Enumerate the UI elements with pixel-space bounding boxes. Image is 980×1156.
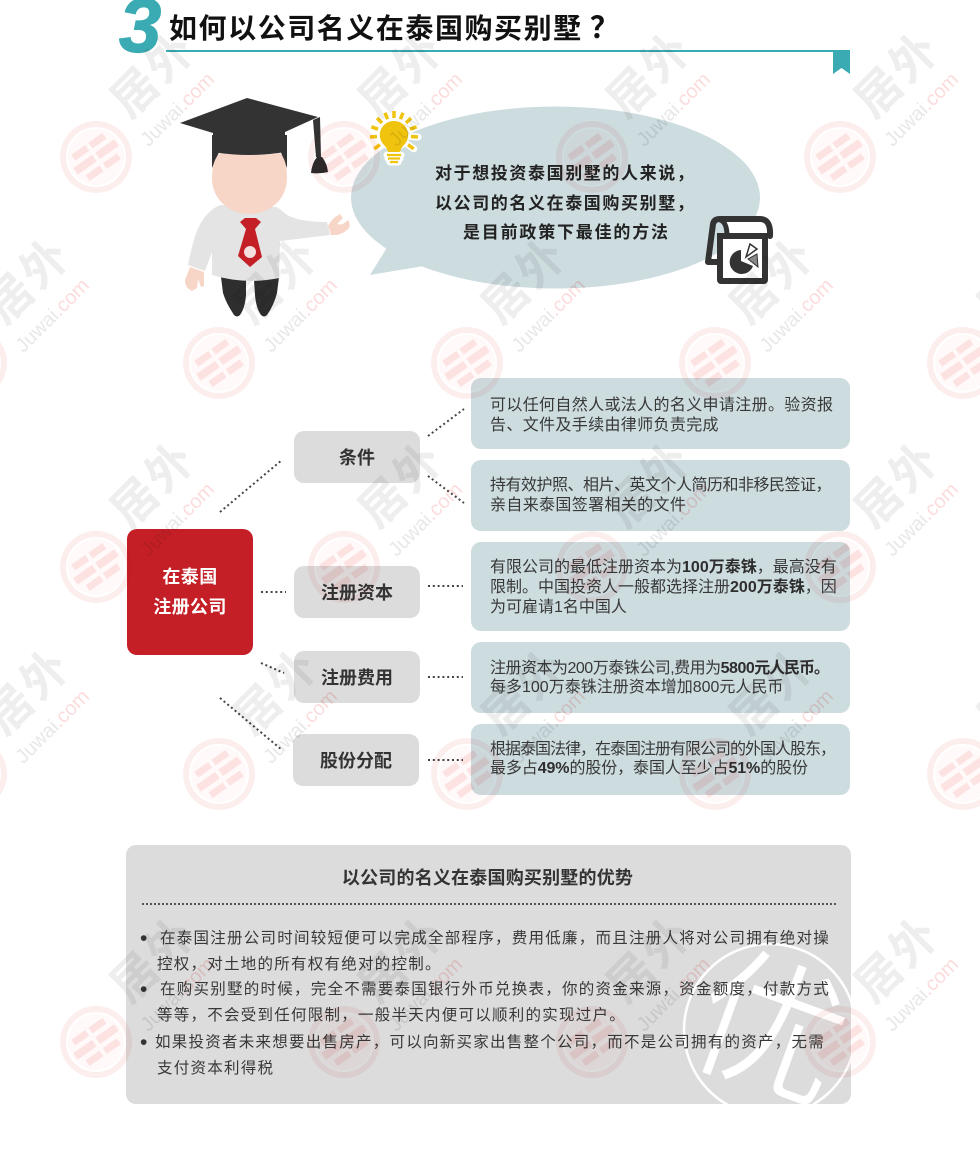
- watermark layer: 居外: [223, 227, 329, 333]
- watermark layer: Juwai.com: [881, 954, 963, 1036]
- watermark layer: 居外: [596, 21, 702, 127]
- watermark layer: 居外: [844, 906, 950, 1012]
- branch: registered capital: 注册资本: [321, 583, 393, 603]
- branch: registration fee: 注册费用: [321, 668, 393, 688]
- branch: shareholding: 股份分配: [320, 751, 392, 771]
- watermark layer: 居外: [348, 21, 454, 127]
- watermark layer: Juwai.com: [385, 69, 467, 151]
- branch: conditions: [294, 431, 420, 483]
- advantage 2: 在购买别墅的时候，完全不需要泰国银行外币兑换表，你的资金来源，资金额度，付款方式: [160, 981, 830, 998]
- watermark layer: 居外: [596, 431, 702, 537]
- watermark layer: 居外: [596, 906, 702, 1012]
- watermark layer: Juwai.com: [260, 686, 342, 768]
- title: 如何以公司名义在泰国购买别墅？: [169, 12, 621, 45]
- watermark layer: Juwai.com: [508, 686, 590, 768]
- advantage 3: [140, 1031, 825, 1077]
- detail panel: shareholding: 根据泰国法律，在泰国注册有限公司的外国人股东，: [490, 741, 835, 758]
- watermark layer: Juwai.com: [756, 275, 838, 357]
- watermark layer: Juwai.com: [12, 686, 94, 768]
- bubble text: 对于想投资泰国别墅的人来说，: [435, 164, 695, 183]
- watermark layer: 居外: [719, 638, 825, 744]
- advantage 2: [140, 978, 830, 1024]
- dotted divider: [142, 903, 836, 905]
- detail panel: registration fee: [471, 642, 850, 713]
- detail panel: conditions 1: [471, 378, 850, 449]
- advantage 2: 等等，不会受到任何限制，一般半天内便可以顺利的实现过户。: [157, 1007, 626, 1024]
- detail panel: registered capital: [471, 542, 850, 631]
- bubble text: [435, 164, 695, 242]
- advantage 1: •: [140, 927, 147, 950]
- detail panel: registered capital: 限制。中国投资人一般都选择注册200万泰铢，因: [490, 579, 837, 596]
- watermark layer: Juwai.com: [633, 479, 715, 561]
- watermark layer: 居外: [471, 227, 577, 333]
- watermark layer: 居外: [100, 906, 206, 1012]
- branch: conditions: 条件: [339, 448, 375, 468]
- root box: register a company in Thailand: 注册公司: [153, 597, 227, 617]
- detail panel: conditions 1: 告、文件及手续由律师负责完成: [490, 417, 719, 434]
- detail panel: shareholding: [471, 724, 850, 795]
- watermark layer: 居外: [719, 227, 825, 333]
- watermark layer: Juwai.com: [137, 69, 219, 151]
- root box: register a company in Thailand: 在泰国: [162, 567, 218, 587]
- watermark layer: Juwai.com: [508, 275, 590, 357]
- detail panel: conditions 2: 持有效护照、相片、英文个人简历和非移民签证，: [490, 477, 831, 494]
- watermark layer: Juwai.com: [137, 479, 219, 561]
- detail panel: registered capital: 有限公司的最低注册资本为100万泰铢，最高没有: [490, 559, 837, 576]
- watermark layer: Juwai.com: [260, 275, 342, 357]
- icon: light bulb: [370, 111, 422, 166]
- advantage 1: [140, 927, 830, 973]
- watermark layer: Juwai.com: [756, 686, 838, 768]
- detail panel: registered capital: 为可雇请1名中国人: [490, 599, 627, 616]
- watermark layer: 居外: [844, 21, 950, 127]
- title rule with ribbon: [166, 50, 850, 74]
- watermark layer: Juwai.com: [881, 69, 963, 151]
- watermark layer: 居外: [348, 431, 454, 537]
- graduate character: [180, 98, 350, 316]
- advantage 3: 如果投资者未来想要出售房产，可以向新买家出售整个公司，而不是公司拥有的资产，无需: [155, 1034, 825, 1051]
- advantage 3: •: [140, 1031, 147, 1054]
- branch: registered capital: [294, 566, 420, 618]
- watermark layer: Juwai.com: [633, 954, 715, 1036]
- branch: shareholding: [293, 734, 419, 786]
- detail panel: registration fee: 每多100万泰铢注册资本增加800元人民币: [490, 679, 783, 696]
- detail panel: shareholding: 最多占49%的股份，泰国人至少占51%的股份: [490, 760, 808, 777]
- branch: registration fee: [294, 651, 420, 703]
- watermark layer: Juwai.com: [12, 275, 94, 357]
- watermark layer: 居外: [348, 906, 454, 1012]
- dotted connectors: [219, 408, 464, 761]
- detail panel: registration fee: 注册资本为200万泰铢公司,费用为5800元人民币。: [490, 660, 829, 677]
- advantage 3: 支付资本利得税: [157, 1060, 274, 1077]
- watermark layer: 居外: [844, 431, 950, 537]
- watermark layer: 居外: [100, 431, 206, 537]
- speech bubble: [351, 106, 760, 288]
- root box: register a company in Thailand: [127, 529, 253, 655]
- advantage 1: 在泰国注册公司时间较短便可以完成全部程序，费用低廉，而且注册人将对公司拥有绝对操: [160, 930, 830, 947]
- watermark layer: Juwai.com: [633, 69, 715, 151]
- watermark layer: 居外: [100, 21, 206, 127]
- advantage 1: 控权，对土地的所有权有绝对的控制。: [157, 956, 442, 973]
- advantage 2: •: [140, 978, 147, 1001]
- watermark layer: Juwai.com: [385, 954, 467, 1036]
- bubble text: 以公司的名义在泰国购买别墅，: [435, 194, 695, 213]
- watermark layer: Juwai.com: [385, 479, 467, 561]
- detail panel: conditions 2: [471, 460, 850, 531]
- watermark layer: 居外: [471, 638, 577, 744]
- watermark layer: Juwai.com: [881, 479, 963, 561]
- bubble text: 是目前政策下最佳的方法: [463, 223, 670, 242]
- detail panel: conditions 2: 亲自来泰国签署相关的文件: [490, 497, 686, 514]
- panel: advantages: [126, 845, 851, 1104]
- watermark layer: Juwai.com: [137, 954, 219, 1036]
- icon: chart scroll: [705, 216, 774, 284]
- detail panel: conditions 1: 可以任何自然人或法人的名义申请注册。验资报: [490, 397, 833, 414]
- watermark layer: 居外: [223, 638, 329, 744]
- advantages heading: 以公司的名义在泰国购买别墅的优势: [342, 868, 633, 888]
